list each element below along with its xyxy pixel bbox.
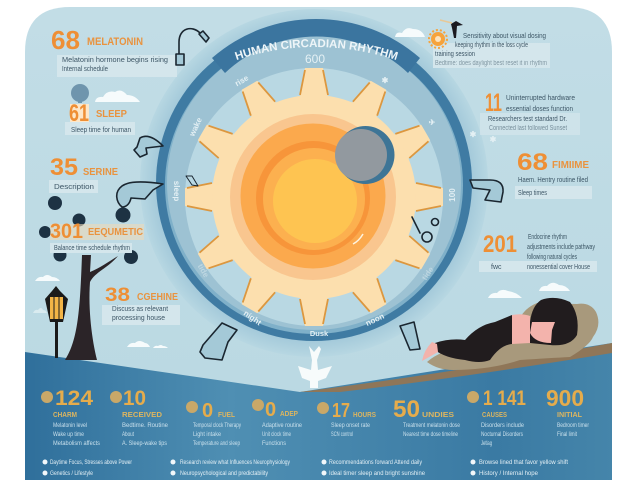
- block: top right: keeping rhythm in the loss cycle: [455, 42, 528, 49]
- block: top right: Bedtime: does daylight best reset it in rhythm: [435, 60, 547, 67]
- ground band: [25, 343, 612, 480]
- block: 35: SERINE: [83, 167, 118, 178]
- dial hour labels: noon: [364, 311, 386, 328]
- block: 11: Researchers test standard Dr.: [488, 116, 567, 123]
- stat: 0 day: 0: [265, 399, 276, 421]
- block: 68: 68: [51, 25, 80, 55]
- dial hour labels: ✱: [490, 135, 497, 144]
- block: 11: 11: [485, 89, 502, 117]
- block: 201: [479, 231, 597, 272]
- stat: 124: Melatonin level: [53, 423, 87, 429]
- dial hour labels: rise: [233, 73, 251, 88]
- stat: 900: INITIAL: [557, 412, 583, 419]
- stat: 0 fuel: Temperature and sleep: [193, 441, 241, 447]
- stat: 124: Metabolism affects: [53, 441, 100, 447]
- title: HUMAN CIRCADIAN RHYTHM: [234, 39, 398, 60]
- block: 68: MELATONIN: [87, 36, 143, 48]
- clouds: [33, 28, 570, 348]
- block: 201: adjustments include pathway: [527, 244, 595, 251]
- footer bullet list: Recommendations forward Attend daily: [329, 459, 423, 466]
- stat: 124: [41, 387, 100, 447]
- block: top right: Sensitivity about visual dosing: [463, 33, 546, 40]
- icon: bird: [440, 20, 463, 38]
- stat: 0 day: Functions: [262, 441, 286, 447]
- dial hour labels: wake: [187, 116, 204, 139]
- footer bullet list: Neuropsychological and predictability: [180, 470, 269, 477]
- block: 68: Melatonin hormone begins rising: [62, 57, 168, 64]
- connector icons on dial: [117, 29, 503, 360]
- footer bullet list: Ideal timer sleep and bright sunshine: [329, 470, 425, 477]
- stat: 10: [110, 387, 169, 447]
- block: 201: 201: [483, 231, 517, 258]
- stat: 0 fuel: [186, 400, 241, 447]
- block: 38: 38: [105, 285, 130, 306]
- stat: 0 day: [252, 399, 303, 447]
- stat: 1 141: Disorders include: [481, 423, 525, 429]
- stat: 1 141: CAUSES: [482, 412, 507, 419]
- bottom figure: [298, 346, 332, 388]
- block: 201: fwc: [491, 264, 502, 271]
- street lamp: [45, 286, 68, 358]
- dial hour labels: tide: [196, 262, 211, 280]
- stat: 50: Treatment melatonin dose: [403, 423, 461, 429]
- sun disc: [212, 95, 416, 299]
- block: 68: [51, 25, 177, 77]
- stat: 1 141: Nocturnal Disorders: [481, 432, 523, 438]
- dial hour labels: [172, 52, 497, 338]
- stat: 10: 10: [123, 387, 146, 410]
- block: 35: Description: [54, 184, 94, 191]
- block: top right: training session: [435, 51, 475, 58]
- stat: 50: UNDIES: [422, 412, 454, 419]
- block: 11: [480, 89, 580, 135]
- block: 301: Balance time schedule rhythm: [54, 245, 130, 252]
- stat: 900: 900: [546, 385, 584, 411]
- stat: 1 141: 1 141: [483, 387, 526, 410]
- stat: 900: [546, 385, 589, 438]
- stat: 0 day: Adaptive routine: [262, 423, 303, 429]
- circular clock dial: [140, 9, 488, 357]
- stat: 0 day: ADEP: [280, 411, 298, 418]
- stat: 0 day: Unit clock time: [262, 432, 291, 438]
- footer bullet list: [42, 459, 568, 477]
- block: 11: Uninterrupted hardware: [506, 95, 575, 102]
- block: 38: processing house: [112, 315, 165, 322]
- dial hour labels: night: [242, 309, 263, 327]
- block: 61: [65, 100, 135, 135]
- dial hour labels: sleep: [172, 181, 181, 201]
- stat: 50: Nearest time dose timeline: [403, 432, 459, 438]
- sun rays: [185, 68, 443, 326]
- stat: 50: [393, 396, 461, 438]
- icon: small sun: [429, 30, 447, 48]
- block: 301: 301: [50, 220, 83, 243]
- stat: 900: Bedroom timer: [557, 423, 589, 429]
- block: 61: 61: [69, 100, 89, 127]
- block: 201: following natural cycles: [527, 254, 577, 261]
- dial hour labels: ✈: [429, 118, 436, 127]
- dial hour labels: 100: [448, 188, 457, 202]
- block: 68 right: Sleep times: [518, 190, 547, 197]
- block: 35: [49, 154, 118, 193]
- block: 68 right: FIMIIME: [552, 160, 589, 171]
- stat: 10: Bedtime. Routine: [122, 423, 169, 429]
- block: 61: SLEEP: [96, 109, 127, 120]
- dial hour labels: tide: [420, 265, 436, 282]
- block: 11: Connected last followed Sunset: [489, 125, 567, 132]
- block: 301: [50, 220, 144, 253]
- footer bullet list: Browse lined that favor yellow shift: [479, 459, 568, 466]
- stat: 0 fuel: Temporal clock Therapy: [193, 423, 241, 429]
- dial hour labels: Dusk: [310, 329, 329, 338]
- stat: 10: RECEIVED: [122, 412, 162, 419]
- block: 38: [102, 285, 180, 325]
- footer bullet list: Daytime Focus, Stresses above Power: [50, 459, 133, 466]
- block: 301: EEQUMETIC: [88, 227, 143, 238]
- tree with round leaves: [39, 196, 138, 360]
- stat: 124: Wake up time: [53, 432, 85, 438]
- block: 35: 35: [50, 154, 78, 181]
- dial hour labels: ✱: [382, 76, 389, 85]
- stat: 0 fuel: Light intake: [193, 432, 222, 438]
- stat: 0 fuel: 0: [202, 400, 213, 422]
- moon: [335, 126, 394, 184]
- block: 38: CGEHINE: [137, 292, 178, 303]
- block: 68 right: Haem. Hentry routine filed: [518, 177, 588, 184]
- dial hour labels: 600: [305, 52, 325, 66]
- dial hour labels: ✱: [470, 130, 477, 139]
- block: 11: essential doses function: [506, 106, 573, 113]
- stat: 17: [317, 400, 376, 438]
- stat: 17: 17: [332, 400, 350, 422]
- stat: 10: A. Sleep-wake tips: [122, 441, 167, 447]
- block: 61: Sleep time for human: [71, 127, 131, 134]
- icon: tree badge above 61: [71, 84, 89, 103]
- block: 38: Discuss as relevant: [112, 306, 168, 313]
- stat: 900: Final limit: [557, 432, 577, 438]
- footer bullet list: Genetics / Lifestyle: [50, 470, 93, 477]
- stat: 1 141: [467, 387, 526, 447]
- block: 68 right: [515, 149, 592, 199]
- block: 68: Internal schedule: [62, 66, 108, 73]
- stat: 124: 124: [55, 387, 93, 410]
- stat: 17: Sleep onset rate: [331, 423, 371, 429]
- stat: 17: SCN control: [331, 432, 353, 438]
- stat: 0 fuel: FUEL: [218, 412, 236, 419]
- block: top right: [433, 33, 550, 68]
- title banner: [212, 19, 420, 73]
- stat: 17: HOURS: [353, 412, 376, 419]
- footer bullet list: History / Internal hope: [479, 470, 538, 477]
- block: 68 right: 68: [517, 149, 548, 176]
- stat: 1 141: Jetlag: [481, 441, 492, 447]
- block: 201: nonessential cover House: [527, 264, 590, 271]
- stat: 10: About: [122, 432, 134, 438]
- stat: 50: 50: [393, 396, 420, 423]
- stat: 124: CHARM: [53, 412, 77, 419]
- footer bullet list: Research review what Influences Neurophysiology: [180, 459, 291, 466]
- block: 201: Endocrine rhythm: [528, 234, 567, 241]
- sleeping person: [422, 298, 598, 370]
